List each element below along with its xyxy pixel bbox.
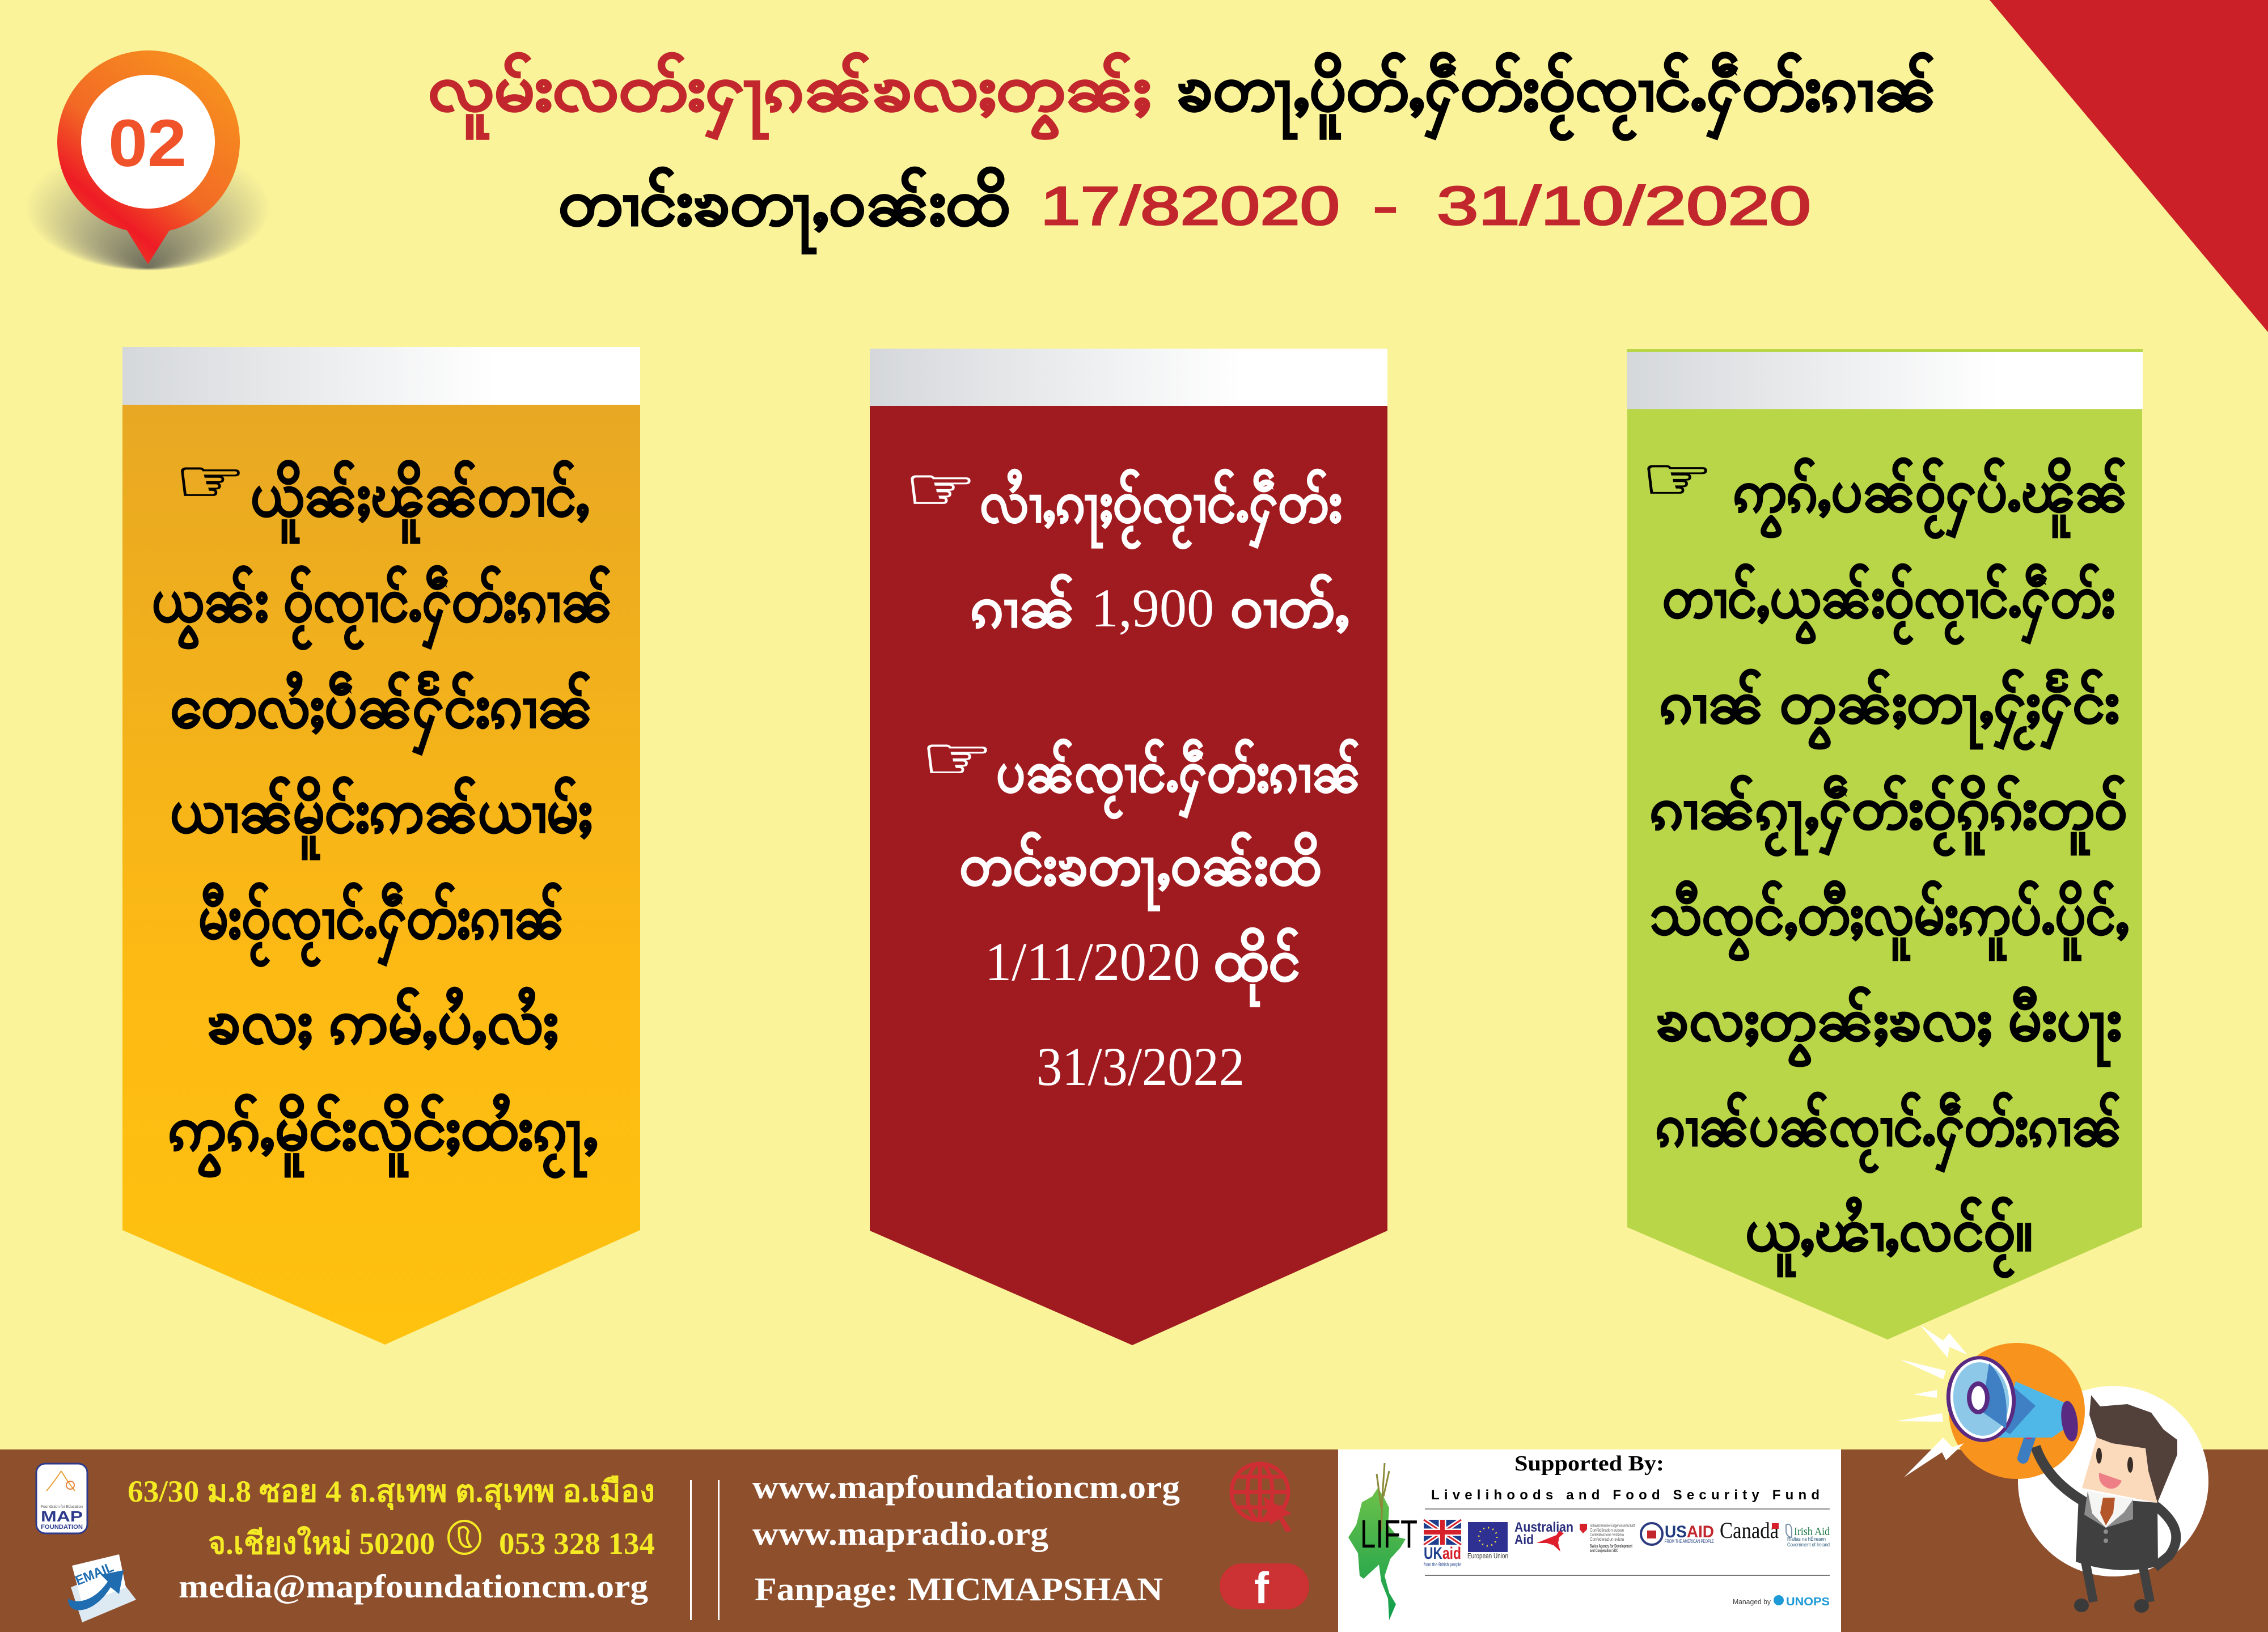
panel text: ဢွၵ်ႇပၼ်ဝႂ်ႁပ်ႉၽိူၼ် [1733,457,2127,539]
Australian Aid logo: Australian [1514,1520,1573,1535]
Irish Aid logo: Rialtas na hÉireann [1787,1536,1826,1542]
USAID logo [1641,1523,1714,1545]
panel text: သီၸွင်ႇတီႈလူမ်းဢူပ်ႉပိူင်ႇ [1650,880,2129,961]
icon: MAP foundation logo: Foundation for Education [41,1505,83,1509]
icon: facebook: f [1254,1563,1270,1613]
Irish Aid logo [1786,1524,1830,1548]
LIFT logo: LIFT [1360,1512,1417,1556]
title line 1 black: ၶတႃႇပိူတ်ႇႁဵတ်းဝႂ်ၸႂၢင်ႉႁဵတ်းၵၢၼ် [1177,53,1936,140]
legs [2085,1559,2150,1602]
eyes [2096,1448,2102,1464]
address line 2: จ.เชียงใหม่ 50200 [208,1525,435,1561]
white circle behind man [2018,1386,2208,1576]
panel text: ၵၢၼ်ပၼ်ၸႂၢင်ႉႁဵတ်းၵၢၼ် [1656,1092,2122,1173]
panel text: ယၢၼ်မိူင်းဢၼ်ယၢမ်ႈ [170,776,593,860]
cone [1998,1381,2076,1438]
lapels [2084,1491,2106,1528]
Australian Aid logo [1514,1520,1573,1552]
title [428,53,1936,253]
icon: phone [448,1521,480,1554]
pin shadow [26,143,270,270]
panel text [959,469,1361,911]
panel text: ဢွၵ်ႇမိူင်းလိူင်ႈထႆးၵႂႃႇ [168,1093,598,1179]
panel text: တင်းၶတႃႇဝၼ်းထိ [959,832,1321,911]
icon: email envelope: EMAIL [73,1559,116,1589]
Swiss agency logo [1580,1523,1635,1553]
Irish Aid logo: Government of Ireland [1787,1542,1830,1548]
jacket [2076,1497,2158,1570]
buttons [2104,1529,2108,1534]
pin number: 02 [108,106,187,181]
panel text: ၶလႈတွၼ်ႈၶလႈ မီးပႃး [1656,986,2122,1067]
icon: email envelope [68,1554,136,1622]
Swiss agency logo: Confederaziun svizra [1590,1537,1624,1542]
panel text: မီးဝႂ်ၸႂၢင်ႉႁဵတ်းၵၢၼ် [198,881,564,967]
date text: 31/3/2022 [1036,1036,1245,1097]
banner [1627,352,2143,409]
Canada logo: Canada [1720,1517,1779,1543]
title dates red: 17/82020 [1040,176,1340,236]
handle [2023,1434,2031,1458]
icon: sound spikes [1896,1325,1967,1477]
pointer icon: ☞ [175,447,246,516]
panel text: ယိူၼ်ႈၽိူၼ်တၢင်ႇ [251,460,590,544]
panel text: တေလႆႈပဵၼ်ႁႅင်းၵၢၼ် [170,671,593,755]
Swiss agency logo: Confederazione Svizzera [1590,1532,1624,1537]
icon: MAP foundation logo: MAP [41,1508,83,1525]
banner [122,347,640,405]
panel text [152,460,612,1179]
Swiss agency logo: Confédération suisse [1590,1528,1624,1533]
footer divider [690,1480,720,1620]
USAID logo: USAID [1665,1523,1714,1541]
icon: globe with cursor [1232,1464,1292,1532]
panel text [1650,457,2129,1278]
icon: facebook [1220,1563,1309,1613]
footer websites: www.mapradio.org [752,1515,1048,1552]
Swiss agency logo: and Cooperation SDC [1590,1548,1618,1553]
orange circle behind megaphone [1949,1343,2085,1479]
date text [985,927,1300,1097]
face [2082,1438,2157,1503]
icon: man in suit [2036,1395,2177,1613]
pointer icon 1: ☞ [904,455,977,524]
footer band [0,1449,2268,1632]
hair [2089,1395,2177,1503]
managed by UNOPS: Managed by [1733,1597,1771,1606]
mouth [2099,1473,2122,1489]
managed by UNOPS: UNOPS [1786,1596,1830,1608]
title dates red: - [1373,176,1398,236]
location pin badge 02 [26,50,270,270]
address line 1: 63/30 ม.8 ซอย 4 ถ.สุเทพ ต.สุเทพ อ.เมือง [128,1474,655,1511]
panel text: ပၼ်ၸႂၢင်ႉႁဵတ်းၵၢၼ် [996,739,1361,819]
green top strip [1627,349,2143,353]
panel: green [1627,349,2143,1339]
panel text: ၵၢၼ် 1,900 ဝၢတ်ႇ [971,574,1349,639]
title dates red [1040,176,1811,236]
USAID logo: FROM THE AMERICAN PEOPLE [1665,1538,1714,1544]
title line 2 black: တၢင်းၶတႃႇဝၼ်းထိ [558,167,1009,253]
UK aid logo [1424,1520,1461,1567]
phone number: 053 328 134 [499,1527,655,1561]
icon: MAP foundation logo [36,1464,87,1533]
UK aid logo: UKaid [1424,1544,1461,1563]
LIFT logo [1348,1463,1417,1620]
supported by heading: Supported By: [1514,1452,1664,1476]
pointer icon: ☞ [1641,444,1713,514]
other arm [2155,1505,2176,1567]
tie [2100,1498,2115,1525]
ribbon body [870,406,1387,1345]
icon: MAP foundation logo: FOUNDATION [41,1524,83,1531]
panel text: လၢႆႇၵႃႈဝႂ်ၸႂၢင်ႉႁဵတ်း [980,469,1342,549]
banner [870,349,1387,406]
panel: red [870,349,1387,1345]
Irish Aid logo: Irish Aid [1794,1525,1830,1538]
icon: megaphone [1942,1353,2080,1458]
mouth rim [1942,1353,2020,1446]
ribbon body [1627,409,2142,1339]
panel text: ၵၢၼ် တွၼ်ႈတႃႇႁႂ်ႈႁႅင်း [1660,669,2119,751]
supporters panel [1338,1449,1841,1632]
date text: 1/11/2020 ထိုင် [985,927,1300,1007]
panel text: ယူႇၽၢႆႇလင်ဝႂ်။ [1745,1196,2033,1278]
title dates red: 31/10/2020 [1437,176,1811,236]
panel text: တၢင်ႇယွၼ်းဝႂ်ၸႂၢင်ႉႁဵတ်း [1662,563,2115,645]
footer websites [752,1469,1180,1608]
fund name: Livelihoods and Food Security Fund [1431,1487,1820,1503]
red corner triangle [1990,0,2268,332]
driver [1967,1381,1990,1414]
Swiss agency logo: Schweizerische Eidgenossenschaft [1590,1523,1635,1528]
title line 1 red: လူမ်းလတ်းႁႃၵၼ်ၶလႈတွၼ်ႈ [428,53,1151,139]
small end [2059,1400,2080,1443]
panel text: ၶလႈ ဢမ်ႇပႆႇလႆႈ [207,986,558,1055]
footer websites: www.mapfoundationcm.org [752,1469,1180,1506]
hand [2143,1549,2154,1567]
managed by UNOPS [1733,1595,1830,1608]
panel text: ယွၼ်း ဝႂ်ၸႂၢင်ႉႁဵတ်းၵၢၼ် [152,565,612,650]
European Union logo: European Union [1467,1552,1508,1560]
pin body [57,50,240,264]
Swiss agency logo: Swiss Agency for Development [1590,1544,1632,1549]
shoes [2074,1599,2089,1612]
shirt [2088,1491,2133,1528]
panel: yellow [122,347,640,1345]
raised arm [2036,1447,2083,1501]
pointer icon 2: ☞ [921,724,993,793]
footer address [128,1474,655,1605]
UK aid logo: from the British people [1424,1562,1461,1567]
email address: media@mapfoundationcm.org [179,1568,648,1605]
Australian Aid logo: Aid [1514,1532,1534,1548]
European Union logo [1467,1522,1508,1560]
panel text: ၵၢၼ်ၵႂႃႇႁဵတ်းဝႂ်ၵိူၵ်းတူဝ် [1650,775,2127,857]
footer websites: Fanpage: MICMAPSHAN [755,1571,1163,1608]
ribbon body [122,405,640,1345]
